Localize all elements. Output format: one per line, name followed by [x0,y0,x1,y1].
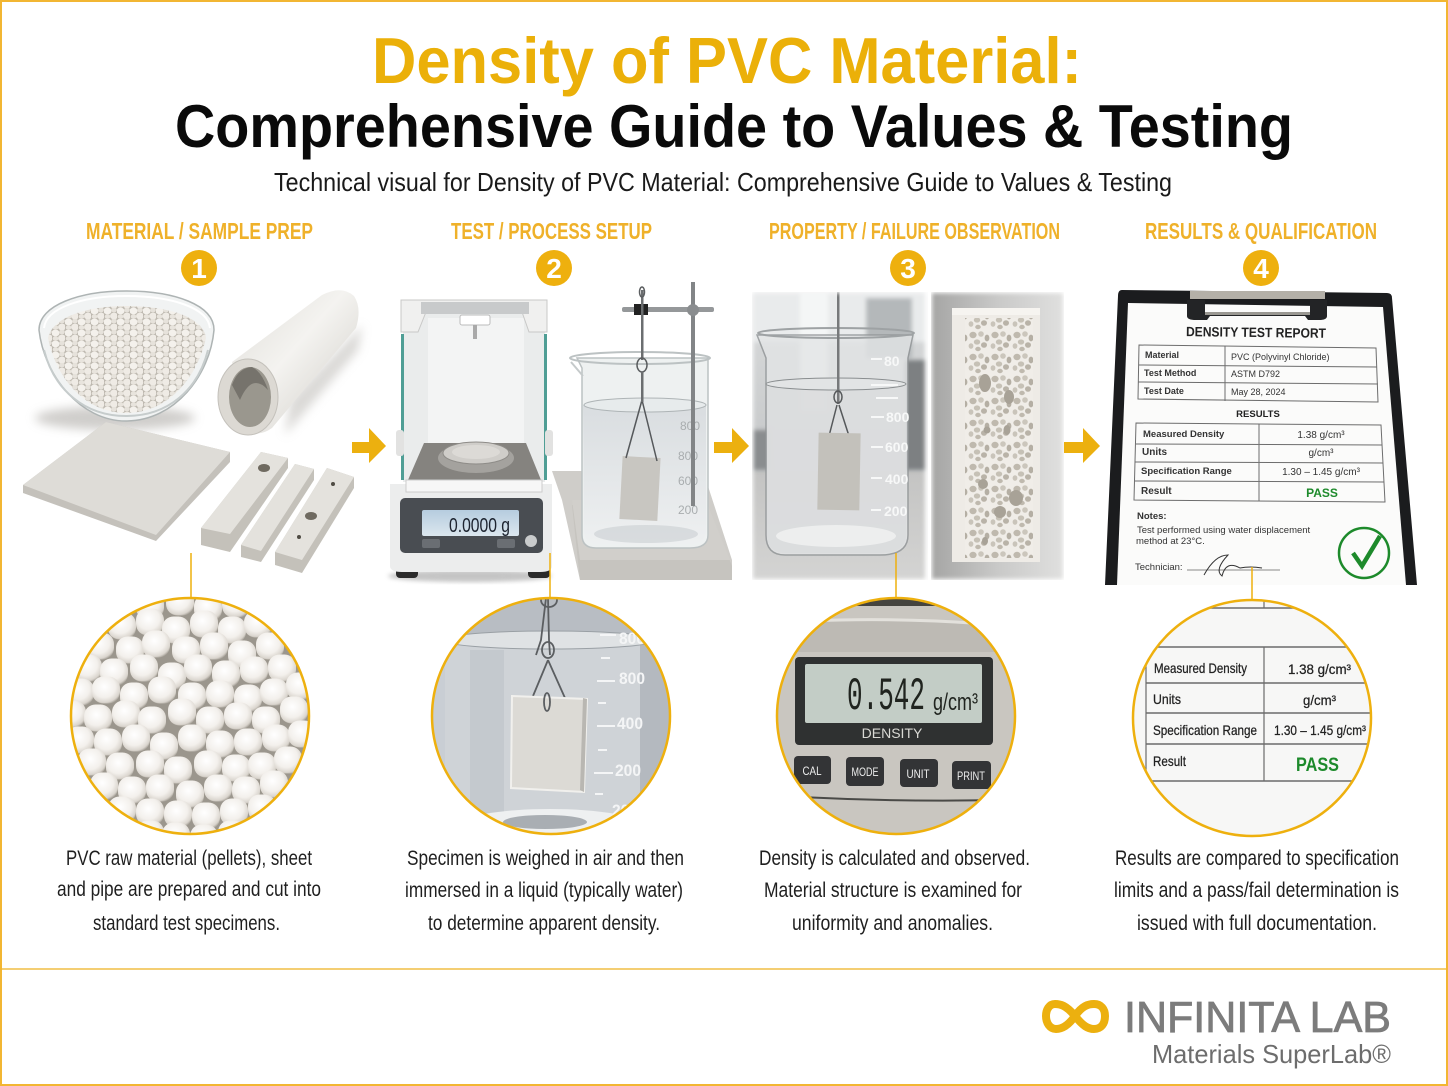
caption 4: limits and a pass/fail determination is [1114,879,1399,902]
zoom circle: results table [1133,600,1372,836]
zoom circle: immersed specimen: 200 [612,801,638,820]
zoom circle: immersed specimen: 200 [615,761,641,780]
illustration: clipboard density test report [1105,290,1417,585]
beaker with specimen [570,352,710,548]
report info table: May 28, 2024 [1231,387,1286,397]
zoom circle: density display: 0.542 [847,671,925,723]
zoom circle: immersed specimen: 400 [617,714,643,733]
caption 1: and pipe are prepared and cut into [57,878,321,901]
leader line 3 [895,553,897,598]
zoom circle: density display: MODE [852,765,878,779]
photo: beaker with immersed specimen: 600 [885,439,909,455]
logo: tagline: Materials SuperLab® [1152,1039,1391,1069]
caption 3: uniformity and anomalies. [792,912,993,935]
bowl of pellets [35,291,214,430]
heading: step 1: MATERIAL / SAMPLE PREP [86,218,313,244]
subtitle: Technical visual for Density of PVC Material: Comprehensive Guide to Values & Testing [274,167,1172,197]
badge 4: 4 [1253,253,1269,284]
zoom circle: results table: Measured Density [1154,660,1247,676]
zoom circle: immersed specimen: 800 [619,669,645,688]
footer divider [2,968,1446,970]
photo: beaker with immersed specimen: 80 [884,353,900,369]
logo: infinity mark [1046,1004,1105,1029]
report results table: 1.30 – 1.45 g/cm³ [1282,467,1361,478]
beaker with specimen: 200 [678,503,698,517]
report info table: PVC (Polyvinyl Chloride) [1231,352,1330,362]
caption 2 [405,847,684,935]
photo: beaker with immersed specimen: 400 [885,471,909,487]
report results table: Result [1141,486,1172,497]
report info table: Test Date [1144,386,1184,396]
sheet [23,422,230,541]
photo: beaker with immersed specimen: 200 [884,503,908,519]
zoom circle: density display: DENSITY [862,725,923,741]
caption 1 [57,847,321,935]
beaker with specimen: 800 [680,419,700,433]
zoom circle: immersed specimen: 800 [619,629,645,648]
notes: Technician: [1135,562,1183,573]
pass check mark [1339,528,1389,578]
notes: Notes: [1137,511,1167,522]
heading: step 2: TEST / PROCESS SETUP [451,218,652,244]
illustration: PVC pellets, pipe, sheet and bars [23,290,362,573]
notes: method at 23°C. [1136,536,1205,547]
notes [1135,511,1311,573]
leader line 1 [190,553,192,598]
report results table: Specification Range [1141,466,1232,477]
badge 3: 3 [900,253,916,284]
badge 2: 2 [546,253,562,284]
arrow 1 [352,428,386,463]
zoom circle: results table: 1.30 – 1.45 g/cm³ [1274,722,1366,738]
photo: foam cross-section [929,290,1066,582]
notes: Test performed using water displacement [1137,525,1311,536]
report info table: Material [1145,350,1179,360]
zoom circle: density display: CAL [802,764,822,778]
report results table [1134,423,1385,502]
illustration: analytical balance and beaker [388,282,732,582]
zoom circle: PVC pellets [70,596,310,836]
caption 4: issued with full documentation. [1137,912,1377,935]
badge 1: 1 [191,253,207,284]
results label: RESULTS [1236,409,1280,420]
leader line 4 [1251,567,1253,600]
caption 4 [1114,847,1399,935]
caption 2: immersed in a liquid (typically water) [405,879,683,902]
arrow 2 [714,428,749,463]
zoom circle: immersed specimen [432,593,672,841]
zoom circle: results table: Units [1153,691,1181,707]
zoom circle: density display: g/cm³ [933,689,978,716]
signature [1187,555,1280,576]
caption 2: to determine apparent density. [428,912,660,935]
caption 3 [759,847,1030,935]
badge 3 [890,250,926,286]
stand [622,282,714,506]
arrow 3 [1064,428,1100,463]
title: Density of PVC Material: [372,24,1082,97]
pipe [218,290,362,435]
clip [1187,291,1327,320]
report results table: PASS [1306,486,1338,500]
caption 3: Density is calculated and observed. [759,847,1030,870]
zoom circle: density display [777,598,1017,834]
photo: beaker with immersed specimen: 800 [886,409,910,425]
zoom circle: results table: 1.38 g/cm³ [1288,661,1351,677]
photo: beaker with immersed specimen [750,290,1066,582]
heading: step 3: PROPERTY / FAILURE OBSERVATION [769,218,1060,244]
leader line 2 [549,553,551,598]
zoom circle: density display: UNIT [906,767,930,781]
report info table: ASTM D792 [1231,369,1280,379]
caption 1: PVC raw material (pellets), sheet [66,847,312,870]
balance display: 0.0000 g [449,515,510,537]
report results table: 1.38 g/cm³ [1297,430,1345,441]
report info table: Test Method [1144,368,1196,378]
report title: DENSITY TEST REPORT [1186,324,1327,341]
badge 2 [536,250,572,286]
report info table [1138,345,1378,402]
report results table: Units [1142,447,1167,458]
title [175,24,1293,160]
beaker with specimen: 600 [678,474,698,488]
zoom circle: results table: PASS [1296,755,1339,776]
report results table: g/cm³ [1308,448,1334,459]
zoom circle: density display: PRINT [957,769,986,783]
zoom circle: results table: g/cm³ [1303,692,1336,708]
zoom circle: results table: Specification Range [1153,722,1257,738]
logo [1046,993,1391,1069]
report results table: Measured Density [1143,429,1225,440]
balance display [400,498,543,553]
caption 1: standard test specimens. [93,912,280,935]
test bars [201,452,354,573]
balance [388,300,553,582]
title: Comprehensive Guide to Values & Testing [175,93,1293,160]
caption 3: Material structure is examined for [764,879,1022,902]
badge 1 [181,250,217,286]
beaker with specimen: 800 [678,449,698,463]
logo: wordmark: INFINITA LAB [1124,993,1391,1042]
caption 2: Specimen is weighed in air and then [407,847,684,870]
stone slab [552,471,732,580]
badge 4 [1243,250,1279,286]
zoom circle: results table: Result [1153,753,1186,769]
